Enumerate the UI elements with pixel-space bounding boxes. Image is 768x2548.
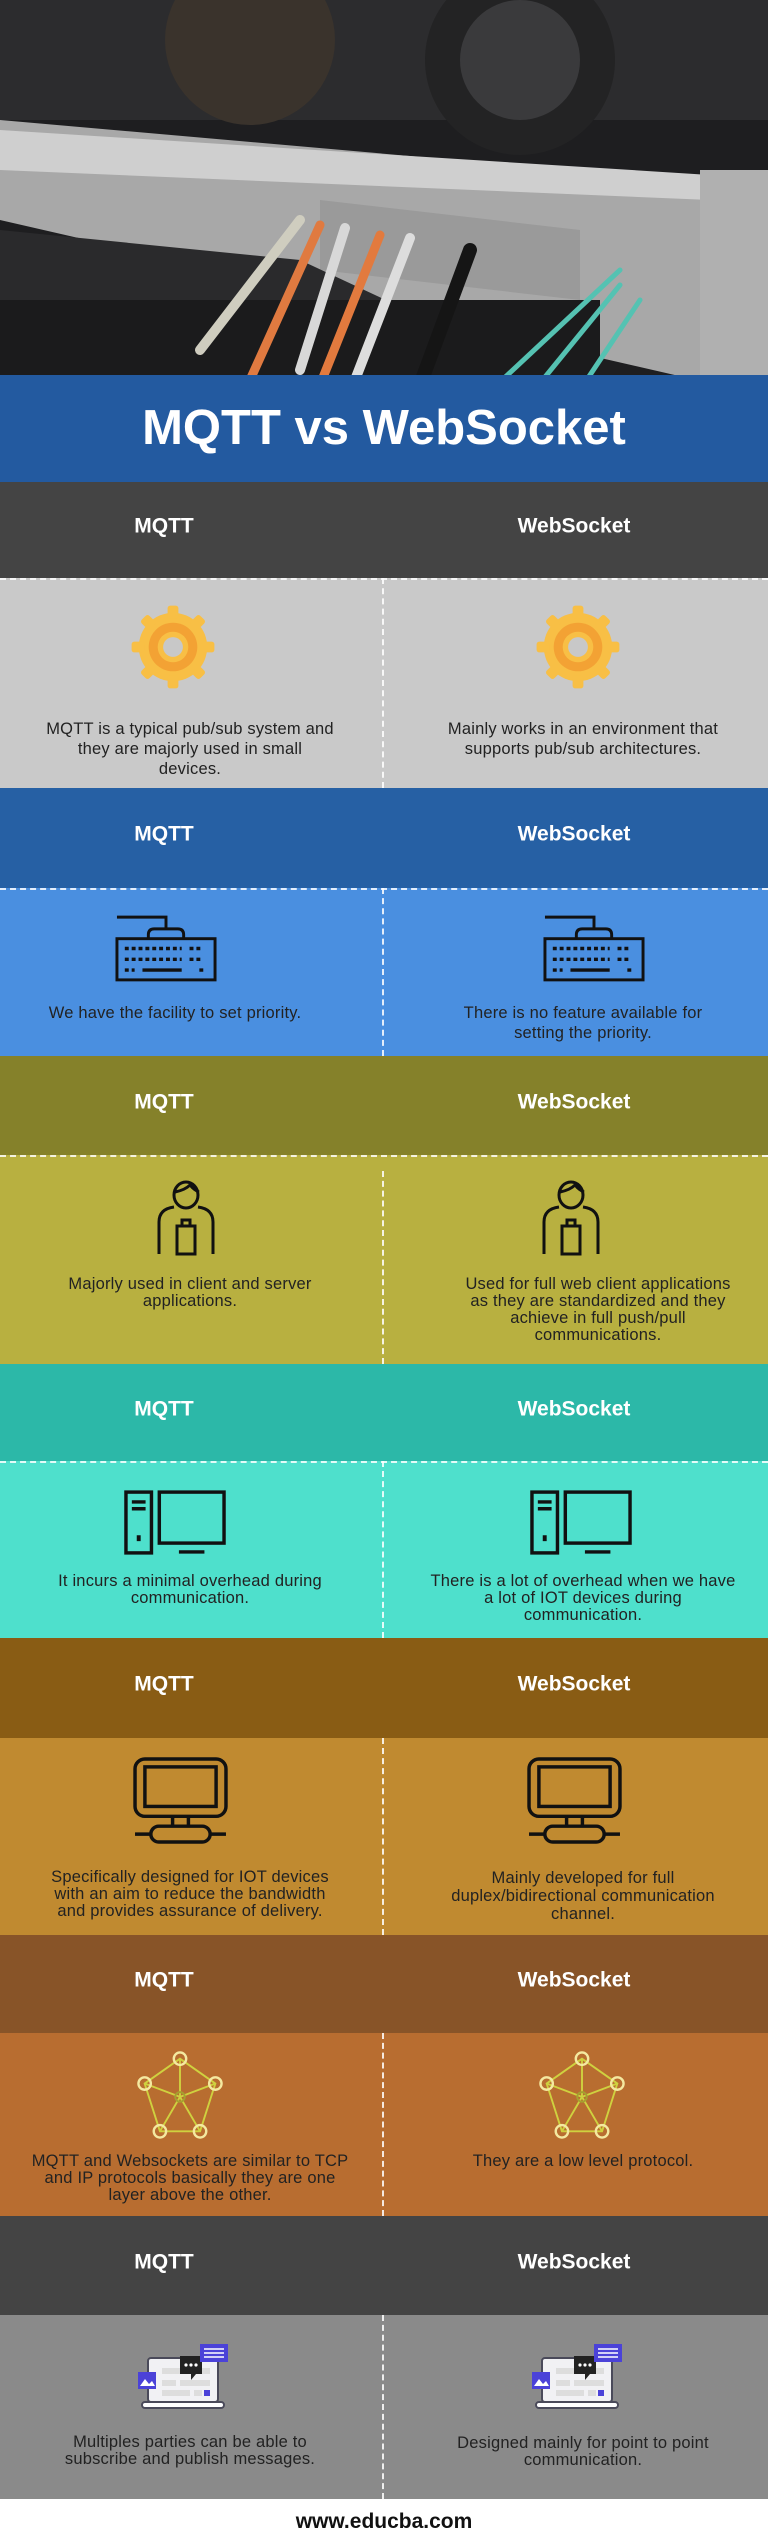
text left [65,2433,315,2468]
hero photo [0,0,768,375]
text right: as they are standardized and they [470,1292,726,1310]
text left [32,2152,348,2204]
icon: gear right [536,606,620,688]
text left: MQTT and Websockets are similar to TCP [32,2152,348,2170]
header 4 [0,1364,768,1461]
header 5: MQTT [134,1672,194,1695]
panel 1 [0,578,768,788]
text right [448,720,718,758]
header 7: MQTT [134,2250,194,2273]
text right: Mainly developed for full [492,1869,674,1887]
icon: laptop chat right [532,2344,622,2409]
text left: Multiples parties can be able to [73,2433,307,2451]
text right: channel. [551,1905,615,1923]
icon: desktop left [124,1490,226,1555]
icon: gear left [132,606,214,688]
text right: setting the priority. [514,1024,652,1042]
text left: subscribe and publish messages. [65,2450,315,2468]
text right: achieve in full push/pull [510,1309,686,1327]
panel 4 [0,1461,768,1638]
header 5 [0,1638,768,1738]
icon: keyboard right [544,916,644,982]
text left: applications. [143,1292,237,1310]
text right: Designed mainly for point to point [457,2434,709,2452]
footer [0,2499,768,2548]
panel 6 [0,2033,768,2216]
text left: with an aim to reduce the bandwidth [54,1885,326,1903]
panel 3 [0,1155,768,1364]
header 2 [0,788,768,888]
text left [68,1275,312,1310]
text left: and provides assurance of delivery. [57,1902,323,1920]
text right [465,1275,731,1344]
header 2: MQTT [134,822,194,845]
header 3: WebSocket [518,1090,630,1113]
icon: desktop right [530,1490,632,1555]
header 2: WebSocket [518,822,630,845]
text right [464,1004,702,1042]
text right [457,2434,709,2469]
text right: There is no feature available for [464,1004,702,1022]
text right: Mainly works in an environment that [448,720,718,738]
text right: Used for full web client applications [465,1275,731,1293]
title banner [0,375,768,482]
icon: network right [539,2051,625,2139]
text right: communication. [524,2451,642,2469]
text left: We have the facility to set priority. [49,1004,301,1022]
header 3: MQTT [134,1090,194,1113]
text left: It incurs a minimal overhead during [58,1572,322,1590]
header 1 [0,482,768,578]
text left: they are majorly used in small [78,740,302,758]
text left: Majorly used in client and server [68,1275,312,1293]
text right: duplex/bidirectional communication [451,1887,715,1905]
header 3 [0,1056,768,1155]
text left: MQTT is a typical pub/sub system and [46,720,334,738]
text right: There is a lot of overhead when we have [430,1572,735,1590]
text left [51,1868,329,1920]
icon: keyboard left [116,916,216,982]
panel 5 [0,1738,768,1935]
header 6: WebSocket [518,1968,630,1991]
text left: Specifically designed for IOT devices [51,1868,329,1886]
header 1: MQTT [134,514,194,537]
header 7: WebSocket [518,2250,630,2273]
text left [58,1572,322,1607]
icon: person left [158,1180,214,1256]
header 1: WebSocket [518,514,630,537]
text left: layer above the other. [108,2186,272,2204]
text right: a lot of IOT devices during [484,1589,682,1607]
header 6: MQTT [134,1968,194,1991]
header 4: WebSocket [518,1397,630,1420]
header 5: WebSocket [518,1672,630,1695]
footer: www.educba.com [296,2510,472,2533]
icon: network left [137,2051,223,2139]
header 6 [0,1935,768,2033]
panel 2 [0,888,768,1056]
icon: monitor left [133,1757,228,1844]
header 4: MQTT [134,1397,194,1420]
text right: communication. [524,1606,642,1624]
text right: They are a low level protocol. [473,2152,693,2170]
title banner: MQTT vs WebSocket [142,401,626,455]
text right: communications. [535,1326,661,1344]
icon: person right [542,1180,600,1256]
header 7 [0,2216,768,2315]
text right [451,1869,715,1923]
text left: and IP protocols basically they are one [45,2169,335,2187]
text right: supports pub/sub architectures. [465,740,701,758]
text left [46,720,334,778]
icon: laptop chat left [138,2344,228,2409]
icon: monitor right [527,1757,622,1844]
panel 7 [0,2315,768,2499]
text right [430,1572,735,1624]
text left: devices. [159,760,221,778]
text left: communication. [131,1589,249,1607]
